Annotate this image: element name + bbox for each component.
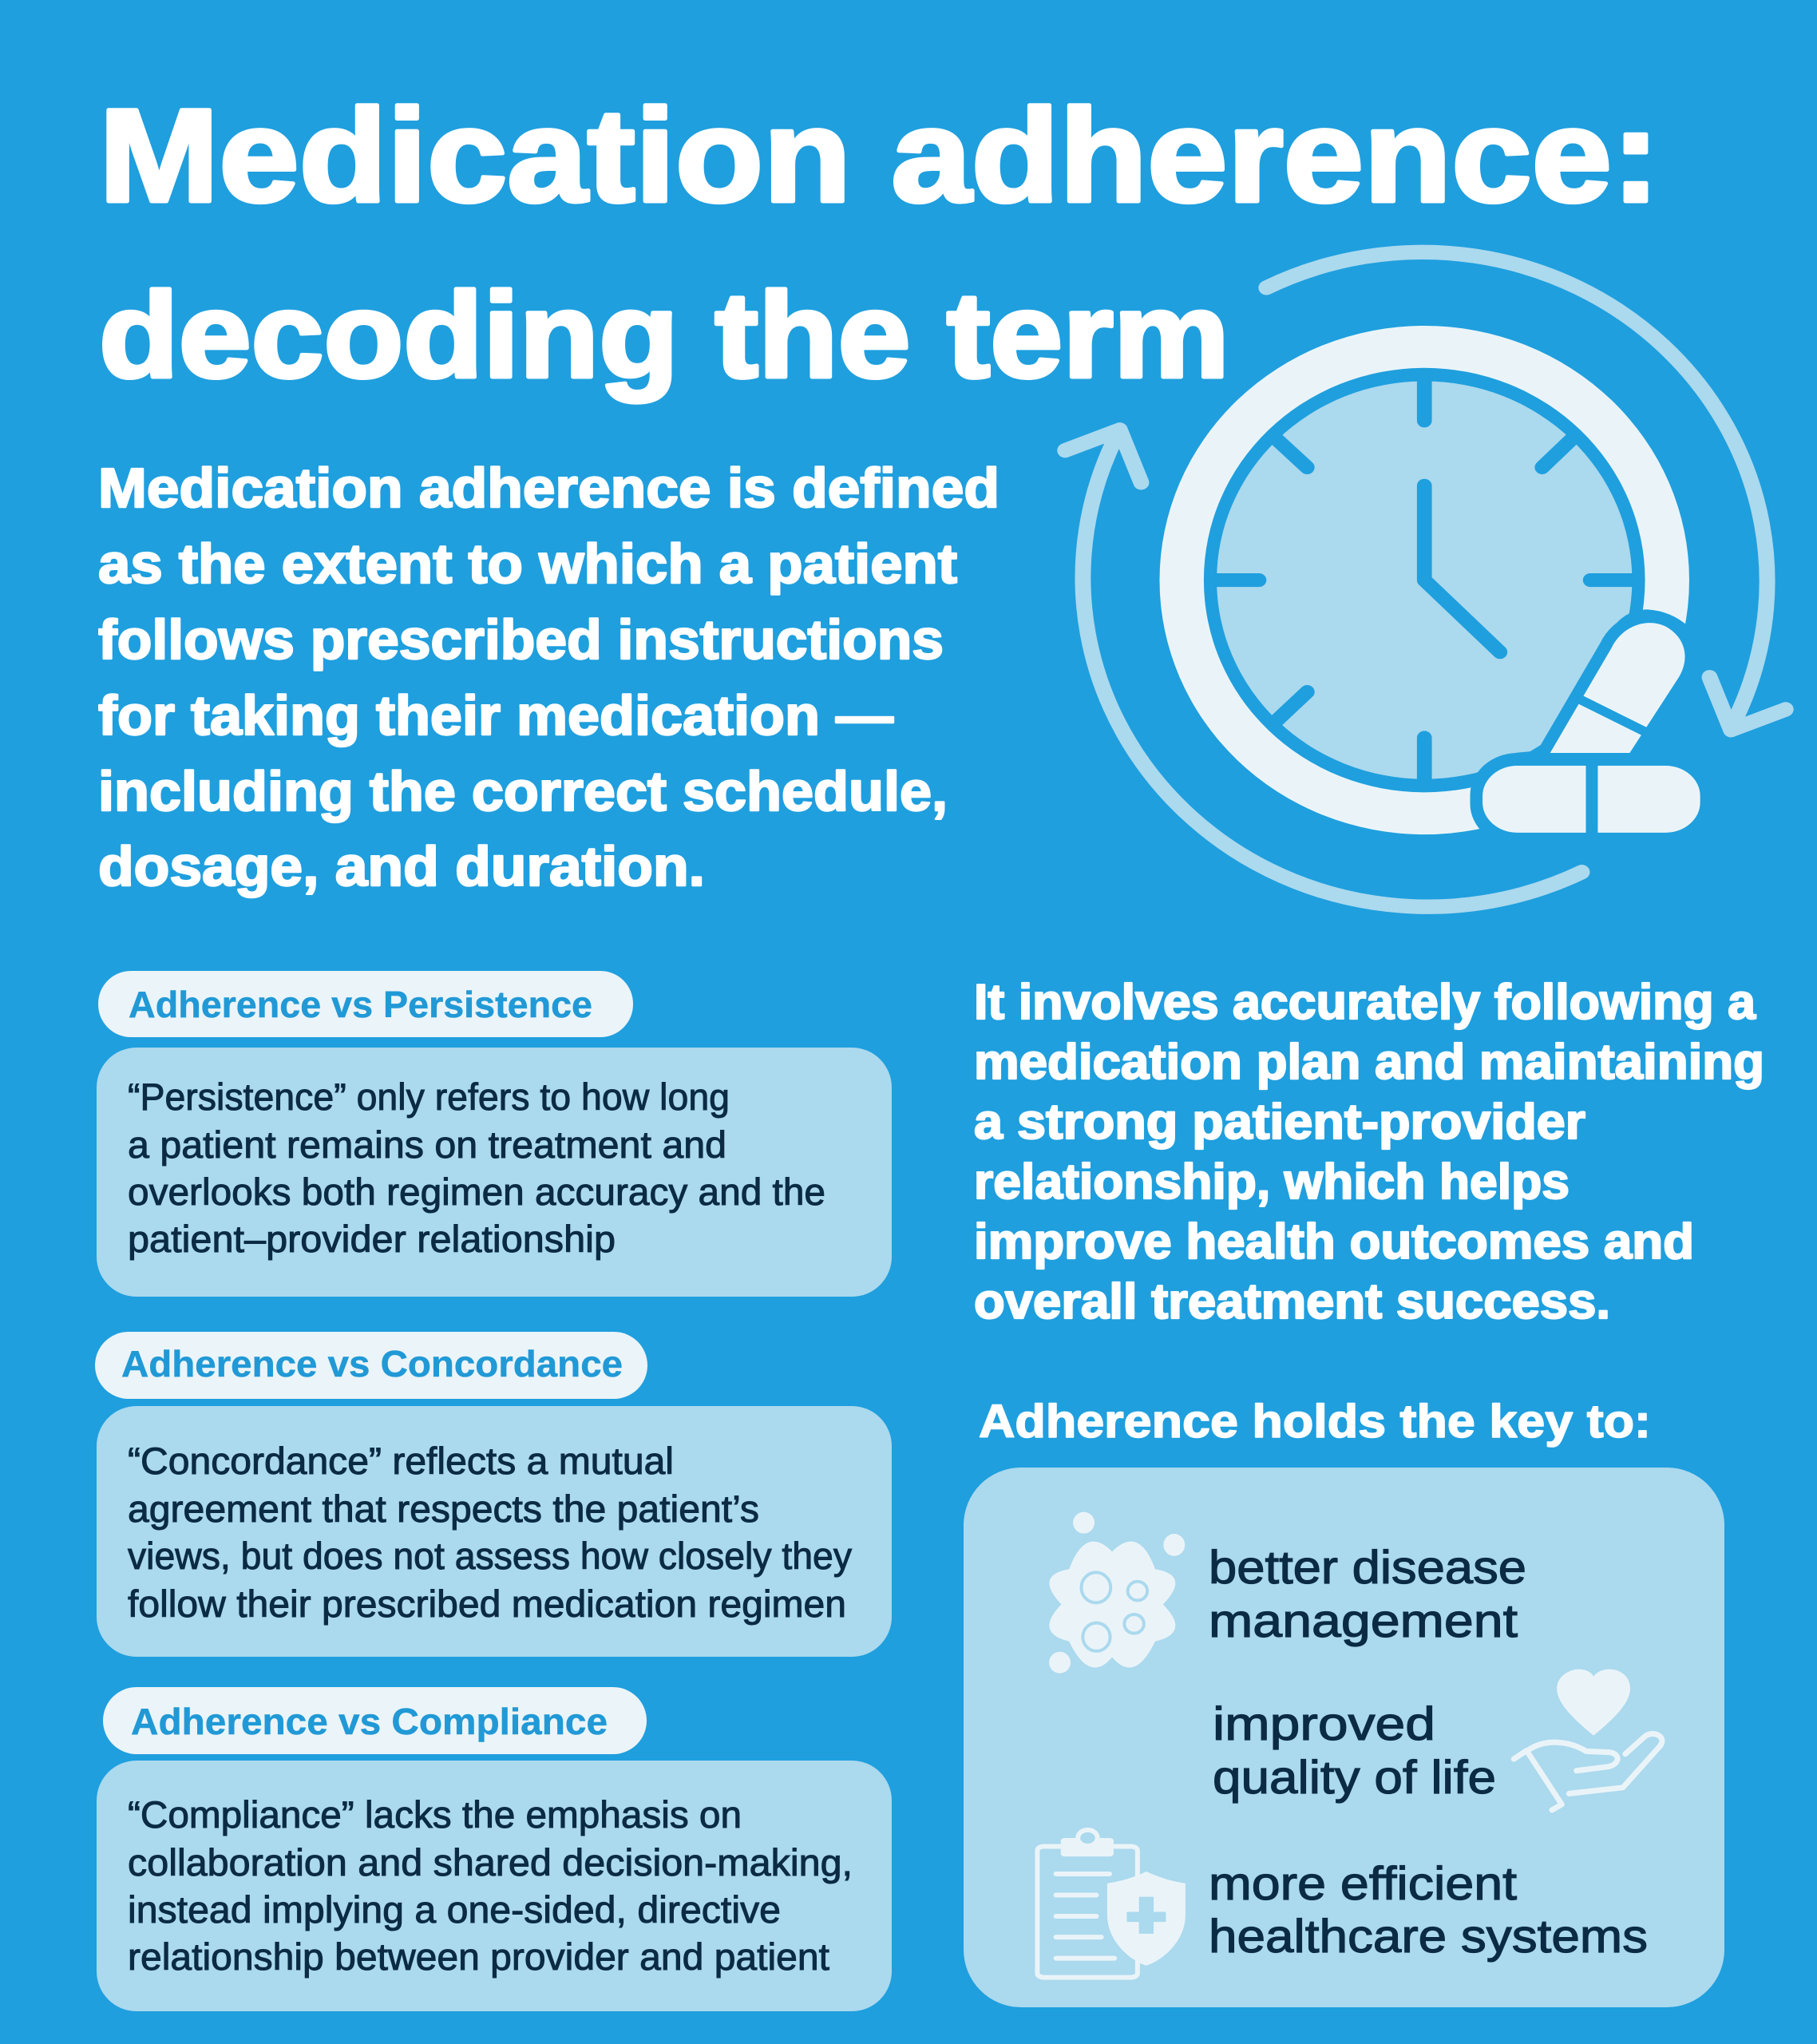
- panel: key benefits: [964, 1468, 1724, 2007]
- pill: Adherence vs Compliance: [103, 1687, 647, 1754]
- icon: virus cell: [1049, 1512, 1185, 1674]
- panel: concordance: follow their prescribed medication regimen: [128, 1583, 846, 1625]
- benefit: better disease management: better disease: [1209, 1542, 1526, 1594]
- icon: clock with pills and circular arrows: [1065, 252, 1786, 907]
- heading: adherence holds the key to: Adherence holds the key to:: [979, 1396, 1651, 1448]
- panel: persistence: “Persistence” only refers to how long: [128, 1075, 730, 1118]
- flat pill: [1470, 753, 1713, 846]
- benefit: more efficient healthcare systems: more efficient: [1209, 1858, 1517, 1910]
- panel: compliance: “Compliance” lacks the emphasis on: [128, 1793, 742, 1836]
- clock ring and face: [1159, 326, 1689, 834]
- clock ticks and hands: [1217, 382, 1633, 779]
- circular arrows: [1065, 252, 1786, 907]
- intro paragraph: Medication adherence is defined: [98, 457, 1000, 519]
- right paragraph: overall treatment success.: [974, 1274, 1610, 1329]
- right paragraph: relationship, which helps: [974, 1155, 1570, 1210]
- panel: persistence: overlooks both regimen accuracy and the: [128, 1171, 825, 1213]
- benefit: better disease management: management: [1209, 1595, 1518, 1647]
- benefit: more efficient healthcare systems: [1209, 1858, 1648, 1963]
- right paragraph: It involves accurately following a: [974, 975, 1756, 1030]
- intro paragraph: for taking their medication —: [98, 684, 893, 747]
- intro paragraph: follows prescribed instructions: [98, 608, 944, 671]
- icon: clipboard with shield: [1037, 1830, 1186, 1978]
- right paragraph: medication plan and maintaining: [974, 1035, 1764, 1090]
- title: [99, 82, 1660, 403]
- benefit: better disease management: [1209, 1542, 1526, 1647]
- intro paragraph: including the correct schedule,: [98, 760, 948, 822]
- title: decoding the term: [99, 267, 1229, 403]
- panel: persistence: [97, 1048, 892, 1297]
- pill: Adherence vs Persistence: Adherence vs Persistence: [129, 984, 592, 1025]
- panel: concordance: views, but does not assess how closely they: [128, 1535, 852, 1577]
- pill: Adherence vs Compliance: Adherence vs Compliance: [131, 1701, 608, 1742]
- right paragraph: [974, 975, 1764, 1329]
- intro paragraph: as the extent to which a patient: [98, 533, 957, 595]
- panel: compliance: relationship between provider and patient: [128, 1935, 829, 1978]
- panel: persistence: a patient remains on treatment and: [128, 1123, 726, 1166]
- tilted pill: [1550, 623, 1685, 754]
- icon: heart in hand: [1514, 1670, 1662, 1810]
- benefit: improved quality of life: improved: [1213, 1698, 1435, 1750]
- benefit: improved quality of life: [1213, 1698, 1496, 1804]
- pill: Adherence vs Persistence: [98, 971, 633, 1037]
- panel: persistence: patient–provider relationship: [128, 1218, 616, 1260]
- panel: compliance: instead implying a one-sided, directive: [128, 1888, 781, 1931]
- right paragraph: improve health outcomes and: [974, 1214, 1694, 1270]
- panel: compliance: [97, 1761, 892, 2011]
- panel: compliance: collaboration and shared decision-making,: [128, 1841, 853, 1884]
- benefit: more efficient healthcare systems: healthcare systems: [1209, 1911, 1648, 1963]
- pill: Adherence vs Concordance: [95, 1332, 647, 1399]
- panel: concordance: “Concordance” reflects a mutual: [128, 1440, 674, 1482]
- panel: concordance: [97, 1406, 892, 1657]
- panel: concordance: agreement that respects the patient’s: [128, 1487, 759, 1530]
- title: Medication adherence:: [99, 82, 1660, 230]
- right paragraph: a strong patient-provider: [974, 1095, 1585, 1150]
- intro paragraph: dosage, and duration.: [98, 835, 705, 897]
- benefit: improved quality of life: quality of life: [1213, 1752, 1496, 1804]
- pill: Adherence vs Concordance: Adherence vs Concordance: [121, 1343, 623, 1384]
- intro paragraph: [98, 457, 1000, 897]
